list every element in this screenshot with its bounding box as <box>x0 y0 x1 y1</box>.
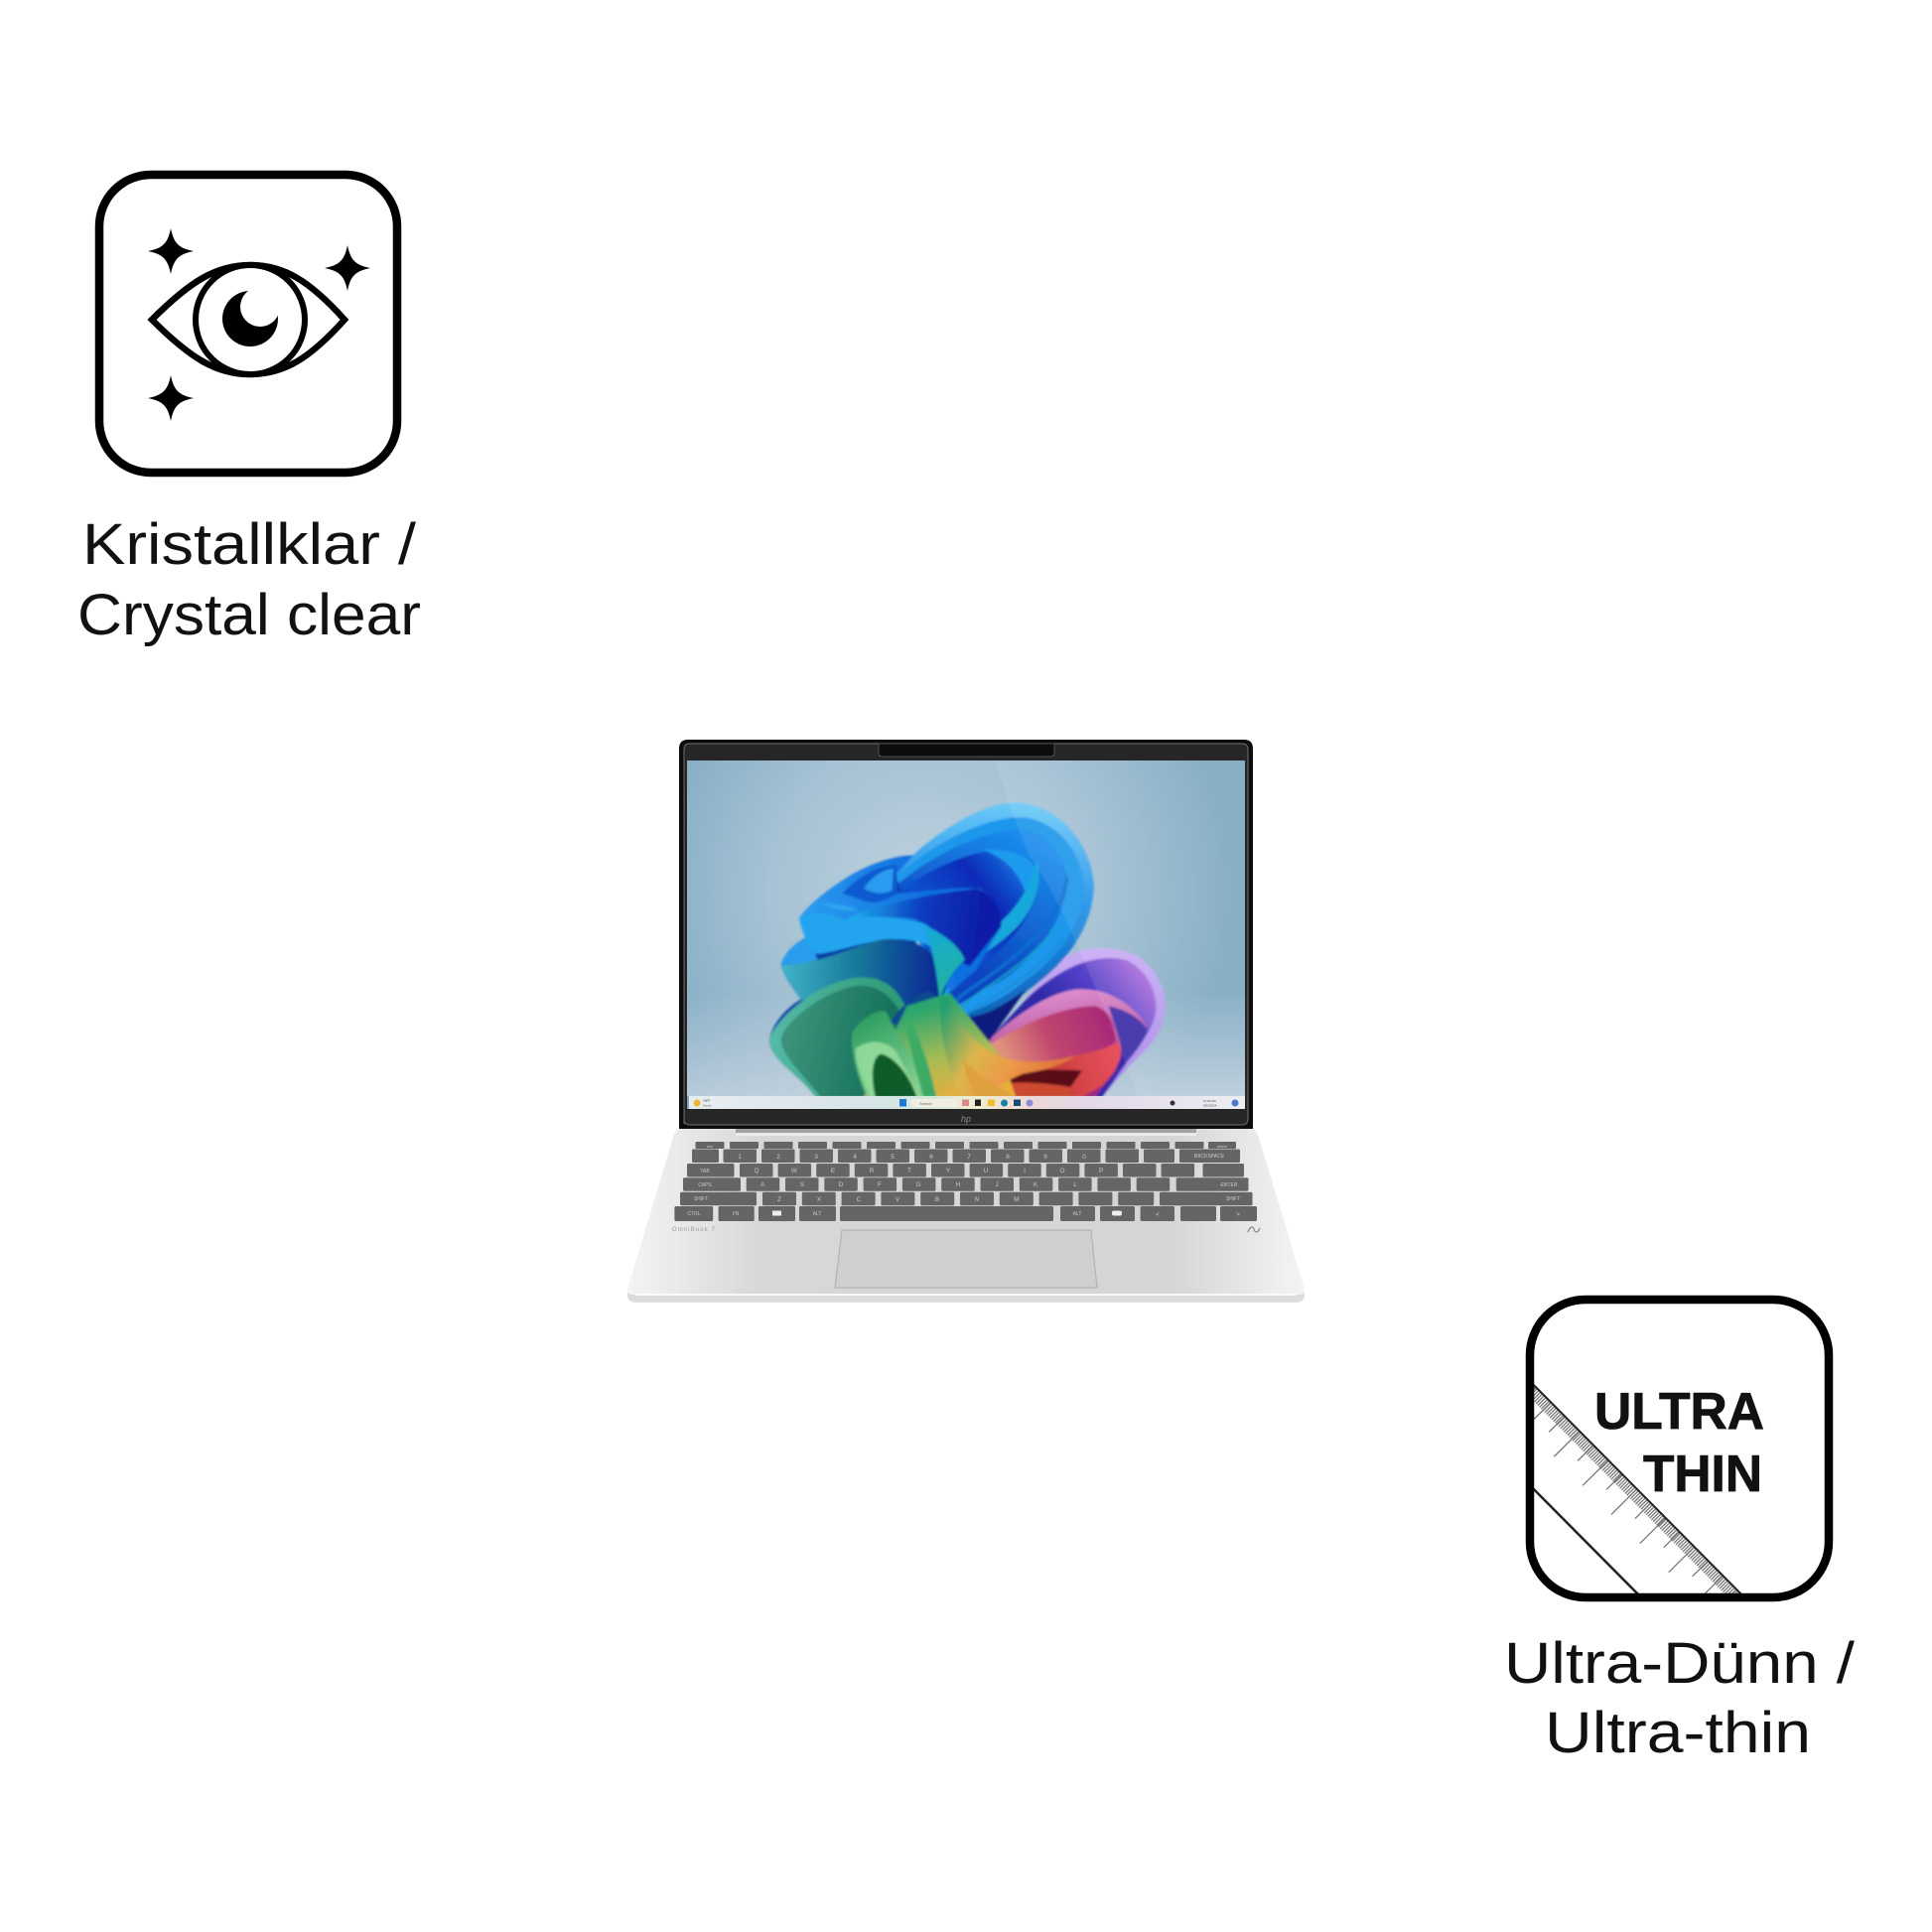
key legends: W <box>791 1168 798 1174</box>
key legends: Y <box>946 1168 951 1174</box>
key legends: F <box>878 1181 882 1188</box>
shift row <box>680 1192 1253 1205</box>
icon: ruler with ultra thin wording: THIN <box>1643 1446 1762 1503</box>
wallpaper bloom <box>769 802 1166 1097</box>
key legends: 7 <box>967 1154 971 1161</box>
key legends: R <box>870 1168 875 1174</box>
model name: OmniBook 7 <box>672 1227 716 1233</box>
glass reflection <box>995 760 1245 1096</box>
bottom row <box>674 1206 1257 1221</box>
key legends: A <box>760 1181 765 1188</box>
bloom backfill, no gaps <box>769 856 996 1097</box>
label: crystal clear: Crystal clear <box>77 583 421 647</box>
icon: eye with sparkles <box>99 175 397 473</box>
key legends: I <box>1024 1168 1026 1174</box>
panel: crystal clear feature <box>77 175 421 647</box>
taskbar: 11:15 AM <box>1203 1099 1216 1103</box>
key legends: SHIFT <box>1226 1196 1240 1202</box>
key legends: esc <box>707 1144 713 1149</box>
key legends: delete <box>1217 1144 1228 1149</box>
key legends: 2 <box>776 1154 780 1161</box>
key legends: J <box>995 1181 999 1188</box>
key legends: D <box>839 1181 844 1188</box>
key legends: S <box>800 1181 805 1188</box>
taskbar: Search <box>919 1101 932 1106</box>
key legends: E <box>831 1168 836 1174</box>
key legends: B <box>935 1196 939 1203</box>
key legends: 9 <box>1043 1154 1047 1161</box>
home row <box>683 1177 1249 1191</box>
qwerty row <box>687 1164 1244 1177</box>
camera notch <box>879 744 1054 757</box>
key legends: X <box>817 1196 822 1203</box>
label: ultra-thin <box>1504 1631 1856 1765</box>
taskbar <box>689 1096 1245 1109</box>
key legends: 0 <box>1082 1154 1086 1161</box>
label: crystal clear <box>77 512 421 647</box>
taskbar: Sunny <box>703 1104 712 1108</box>
key legends: 1 <box>738 1154 742 1161</box>
taskbar: 9/22/2024 <box>1203 1104 1217 1108</box>
key legends: M <box>1014 1196 1020 1203</box>
label: ultra-thin: Ultra-thin <box>1545 1701 1811 1765</box>
key legends: T <box>907 1168 911 1174</box>
taskbar: 79°F <box>703 1099 710 1103</box>
laptop lid <box>679 740 1253 1129</box>
key legends: G <box>915 1181 921 1188</box>
key legends: U <box>984 1168 989 1174</box>
panel: ultra-thin feature <box>1501 1300 1856 1765</box>
label: ultra-thin: Ultra-Dünn / <box>1504 1631 1856 1696</box>
icon: ruler with ultra thin wording <box>1525 1295 1833 1602</box>
key legends: 8 <box>1006 1154 1010 1161</box>
key legends: > <box>1236 1211 1240 1218</box>
copilot badge <box>1248 1227 1260 1232</box>
trackpad <box>835 1230 1097 1288</box>
laptop <box>627 740 1305 1303</box>
hp logo: hp <box>961 1114 971 1124</box>
key legends: < <box>1156 1211 1160 1218</box>
keyboard <box>674 1142 1257 1221</box>
key legends: CTRL <box>687 1211 701 1217</box>
key legends: O <box>1059 1168 1065 1174</box>
key legends: H <box>956 1181 961 1188</box>
key legends: ALT <box>813 1211 821 1217</box>
laptop base deck <box>627 1129 1305 1303</box>
key legends: 6 <box>929 1154 933 1161</box>
key legends: V <box>896 1196 900 1203</box>
key legends: FN <box>733 1211 740 1217</box>
icon: ruler with ultra thin wording: ULTRA <box>1594 1383 1764 1441</box>
key legends: CAPS <box>698 1182 712 1188</box>
key legends: 3 <box>814 1154 818 1161</box>
key legends: BACKSPACE <box>1194 1154 1225 1160</box>
key legends <box>687 1144 1240 1218</box>
number row <box>692 1150 1240 1163</box>
key legends: 4 <box>853 1154 857 1161</box>
key legends: Q <box>754 1168 759 1174</box>
key legends: C <box>857 1196 862 1203</box>
label: crystal clear: Kristallklar / <box>82 512 417 577</box>
key legends: L <box>1073 1181 1077 1188</box>
function row <box>695 1142 1236 1149</box>
key legends: P <box>1099 1168 1103 1174</box>
key legends: ALT <box>1073 1211 1081 1217</box>
key legends: Z <box>777 1196 781 1203</box>
key legends: K <box>1034 1181 1038 1188</box>
key legends: SHIFT <box>694 1196 708 1202</box>
hinge strip <box>736 1129 1196 1135</box>
key legends: ENTER <box>1221 1182 1238 1188</box>
key legends: N <box>975 1196 980 1203</box>
key legends: 5 <box>891 1154 895 1161</box>
screen <box>687 760 1245 1109</box>
key legends: TAB <box>700 1169 710 1174</box>
